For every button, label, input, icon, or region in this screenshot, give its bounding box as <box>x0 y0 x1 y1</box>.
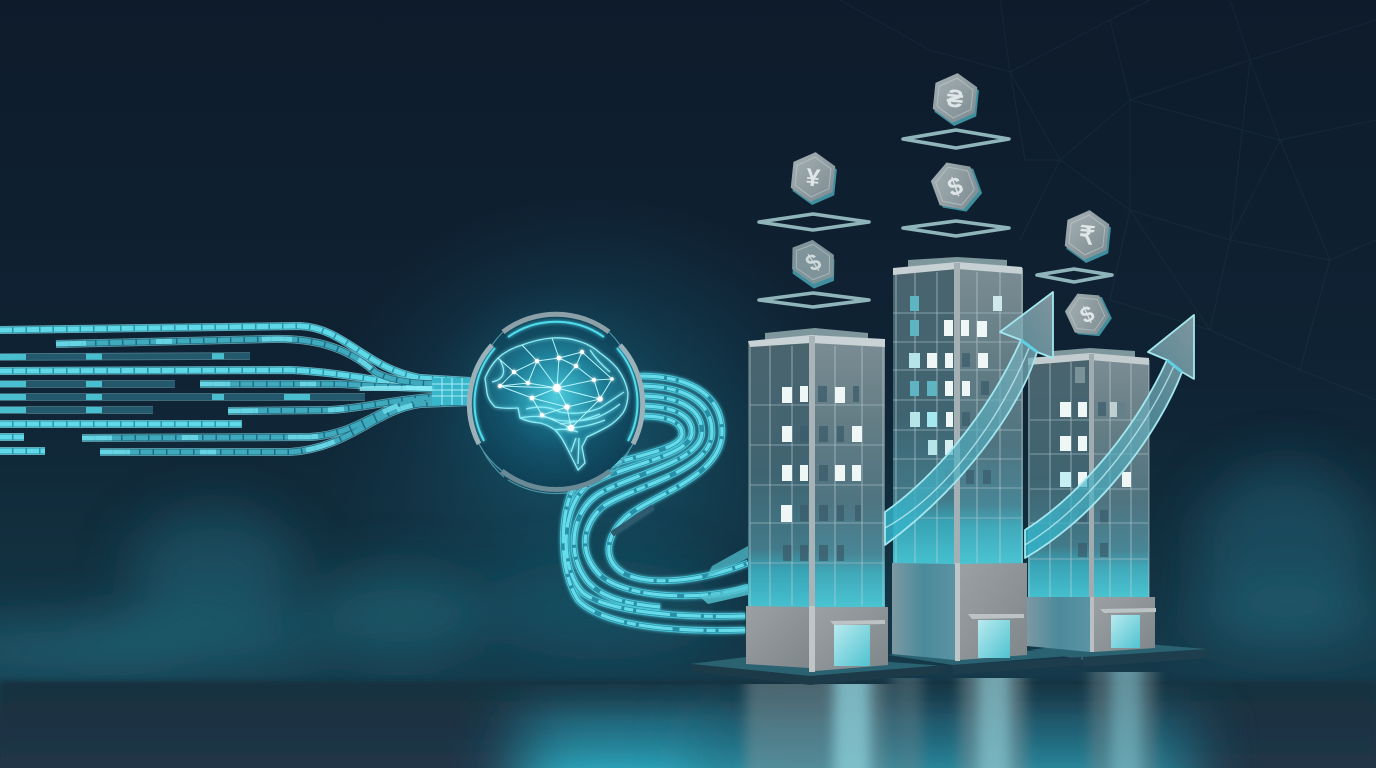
base <box>746 606 809 668</box>
penthouse <box>908 257 1007 267</box>
building: left tower <box>690 328 945 685</box>
glass facade <box>748 342 810 607</box>
dim windows <box>783 386 861 561</box>
bright stream junction <box>360 378 472 405</box>
growth arrow: right <box>1025 315 1194 558</box>
roof rim <box>893 262 1022 275</box>
coin: dollar tilted: $ <box>800 248 826 276</box>
brain outline <box>485 338 628 470</box>
grid <box>750 346 883 606</box>
door and canopy <box>978 620 1010 658</box>
coin: rupee <box>1063 208 1112 265</box>
fog and haze <box>0 465 1376 672</box>
ring disk <box>470 316 642 488</box>
ribbon ends entering left tower <box>700 546 748 604</box>
neural network nodes <box>498 350 614 431</box>
roof rim <box>748 335 885 347</box>
right S-curve data streams <box>563 376 748 630</box>
coin: yen: ¥ <box>805 163 821 193</box>
coin: yen <box>789 150 838 207</box>
brain fill <box>485 338 628 470</box>
lit windows <box>1060 367 1131 487</box>
medium streams <box>56 339 470 452</box>
door and canopy <box>834 625 870 666</box>
growth arrow: middle <box>885 292 1053 545</box>
roof rim <box>1028 353 1149 365</box>
glass facade <box>1028 360 1091 598</box>
coin: dollar tilted <box>780 233 846 295</box>
coin: dollar right: $ <box>1076 300 1099 329</box>
dim windows <box>945 353 991 484</box>
coin: hryvnia: ₴ <box>945 84 965 114</box>
glass facade <box>893 268 957 564</box>
grid <box>896 270 1022 563</box>
lit windows <box>909 296 1002 455</box>
dim streams <box>0 356 365 410</box>
building: middle tower <box>888 257 1081 675</box>
lit windows <box>781 386 862 522</box>
base <box>1027 597 1090 652</box>
neural network lines <box>498 338 612 428</box>
bright streams <box>0 326 470 451</box>
penthouse <box>765 328 868 340</box>
platform <box>690 657 945 676</box>
penthouse <box>1053 348 1135 358</box>
coin: hryvnia <box>931 71 980 128</box>
grid <box>1029 360 1149 597</box>
network mesh decoration <box>840 0 1376 400</box>
thin ring connectors <box>479 332 633 494</box>
door and canopy <box>1111 615 1140 648</box>
coin: dollar upper: $ <box>944 171 967 202</box>
coin: dollar right <box>1060 285 1116 345</box>
floor <box>0 681 1376 768</box>
cyan ring arcs <box>475 322 637 441</box>
base <box>892 563 955 660</box>
platform <box>1030 640 1207 660</box>
metal ring arcs <box>469 314 643 490</box>
coin: rupee: ₹ <box>1078 221 1096 251</box>
coin: dollar upper <box>927 155 986 219</box>
brain node <box>469 314 643 494</box>
building reflections on the floor <box>746 672 1156 768</box>
floating glass frames <box>759 130 1112 307</box>
left data streams <box>0 326 470 452</box>
platform <box>888 645 1081 665</box>
building: right tower <box>1027 348 1207 667</box>
dim windows <box>1060 402 1125 557</box>
